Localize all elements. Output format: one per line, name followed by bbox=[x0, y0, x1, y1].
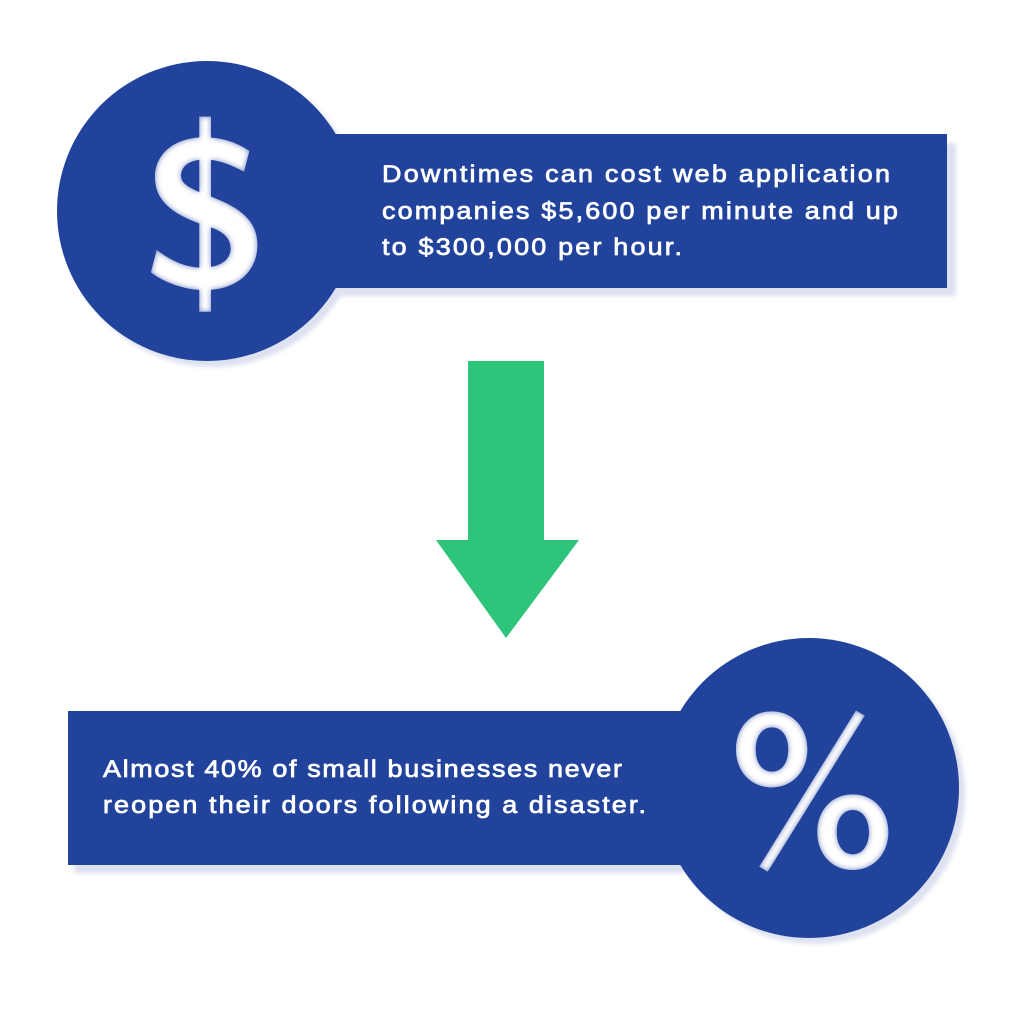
small business text: Almost 40% of small businesses never bbox=[103, 756, 622, 783]
small business text: reopen their doors following a disaster. bbox=[103, 792, 646, 819]
icon: percent sign bbox=[736, 711, 888, 872]
downtime text: to $300,000 per hour. bbox=[382, 234, 682, 261]
icon: dollar sign bbox=[151, 117, 257, 312]
small business text bbox=[103, 756, 646, 819]
downtime text: Downtimes can cost web application bbox=[382, 161, 890, 188]
downtime text: companies $5,600 per minute and up bbox=[382, 198, 898, 225]
panel: small business bbox=[68, 638, 965, 944]
arrow: down bbox=[436, 361, 579, 638]
downtime text bbox=[382, 161, 898, 261]
panel: downtime cost bbox=[57, 61, 956, 367]
